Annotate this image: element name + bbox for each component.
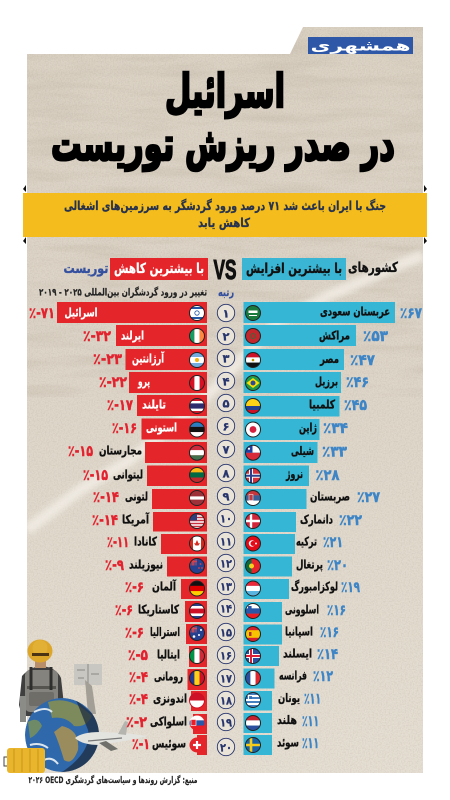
row 7 decrease: Hungary [68,442,207,463]
row 1 increase: Saudi Arabia: عربستان سعودی [320,304,390,320]
row 16 decrease: Italy [128,646,207,667]
row 4 decrease: Peru: پرو [137,374,150,390]
row 12 increase: Portugal: ٪۲۰ [327,556,348,574]
row 1 increase: Saudi Arabia [244,302,422,323]
flag: Peru [189,375,205,391]
row 7 increase: Chile: ٪۳۳ [322,442,347,460]
row 3 increase: Egypt [244,349,375,370]
rank column: ۱۷ [220,672,232,686]
row 10 decrease: United States [92,511,207,532]
row 19 increase: Netherlands: هلند [277,713,297,727]
logo: Hamshahri: همشهری [310,38,410,54]
flag: Egypt [245,352,261,368]
row 14 increase: Slovenia: ٪۱۶ [327,601,346,619]
rank column: ۱۰ [220,512,232,526]
rank column: ۶ [222,420,230,434]
row 19 decrease: Slovakia [126,713,207,734]
row 1 decrease: Israel: ٪-۷۱ [29,304,55,322]
row 9 decrease: Latvia: ٪-۱۴ [93,488,119,506]
heading: countries with highest decrease [64,258,208,280]
flag: Chile [245,445,261,461]
flag: United States [189,513,205,529]
row 9 decrease: Latvia: لتونی [125,490,148,504]
heading: countries with highest decrease: با بیشترین کاهش [114,261,204,277]
row 13 increase: Luxembourg [244,578,360,599]
row 1 decrease: Israel: اسرائیل [64,306,98,320]
row 14 decrease: Costa Rica: ٪-۶ [115,601,133,619]
row 14 increase: Slovenia [244,601,346,622]
rank column: ۲ [222,330,230,344]
row 13 decrease: Germany: آلمان [152,578,177,594]
rank column: ۴ [222,374,230,388]
flag: Canada [189,536,205,552]
row 3 decrease: Argentina [93,349,207,370]
flag: Romania [189,670,205,686]
row 16 decrease: Italy: ٪-۵ [128,646,148,664]
flag: Saudi Arabia [245,305,261,321]
row 11 decrease: Canada [107,533,207,554]
row 15 decrease: Australia: ٪-۶ [125,624,144,642]
rank column: ۳ [222,352,230,366]
row 2 increase: Morocco [244,325,388,346]
row 13 decrease: Germany: ٪-۶ [125,578,144,596]
row 17 decrease: Romania: رومانی [154,670,183,684]
row 18 decrease: Indonesia: اندونزی [153,692,187,706]
flag: Netherlands [245,715,261,731]
row 18 increase: Greece: ٪۱۱ [304,690,321,708]
row 8 increase: Norway: ٪۲۸ [316,466,340,484]
row 3 increase: Egypt: مصر [319,352,339,366]
flag: Morocco [245,328,261,344]
row 1 increase: Saudi Arabia: ٪۶۷ [400,304,422,322]
suitcase [4,748,45,773]
row 19 increase: Netherlands: ٪۱۱ [302,712,319,730]
row 10 increase: Denmark: دانمارک [300,512,333,526]
row 10 decrease: United States: ٪-۱۴ [92,511,118,529]
flag: Spain [245,626,261,642]
row 5 increase: Colombia: کلمبیا [309,398,335,412]
flag: Greece [245,692,261,708]
flag: Serbia [245,490,261,506]
logo: Hamshahri [308,37,413,54]
rank column: ۱۳ [220,580,232,594]
row 9 increase: Serbia [244,488,380,509]
row 12 increase: Portugal [244,556,348,576]
row 17 decrease: Romania: ٪-۴ [129,668,148,686]
row 10 increase: Denmark [244,511,362,532]
row 12 increase: Portugal: پرتغال [296,558,323,572]
rank column: ۸ [222,466,230,480]
subtitle banner: کاهش یابد [198,215,251,230]
subheading: change in arrivals: تغییر در ورود گردشگران بین‌المللی ۲۰۲۵ - ۲۰۱۹ [39,286,207,298]
row 20 decrease: Switzerland: ٪-۱ [132,735,150,753]
row 17 increase: France: ٪۱۲ [313,667,333,685]
heading: countries with highest increase [242,258,399,280]
row 7 decrease: Hungary: ٪-۱۵ [68,442,93,460]
row 12 decrease: New Zealand: ٪-۹ [105,556,124,574]
row 19 increase: Netherlands [244,712,319,733]
row 2 decrease: Ireland: ایرلند [121,328,144,342]
rank column: ۱۹ [220,716,232,730]
title [51,64,395,171]
row 8 decrease: Lithuania: لیتوانی [113,468,143,482]
row 11 increase: Turkey [244,533,343,554]
flag: Hungary [189,445,205,461]
flag: Lithuania [189,467,205,483]
row 20 increase: Sweden: ٪۱۱ [302,734,319,752]
rank column: ۱۲ [220,556,232,570]
rank column: ۱۱ [220,534,232,548]
row 11 decrease: Canada: کانادا [134,534,157,548]
row 10 decrease: United States: آمریکا [122,512,150,526]
title: اسرائیل [165,64,285,118]
flag: Japan [245,422,261,438]
flag: Switzerland [189,737,205,753]
row 4 increase: Brazil: برزیل [315,374,338,388]
map in raised hand [74,664,102,714]
row 17 increase: France: فرانسه [279,668,307,682]
row 2 decrease: Ireland: ٪-۳۲ [83,327,111,345]
flag: France [245,670,261,686]
row 12 decrease: New Zealand [105,556,207,576]
rank column: ۹ [222,490,230,504]
row 6 increase: Japan [244,419,348,440]
row 3 decrease: Argentina: ٪-۲۳ [93,350,122,368]
flag: Portugal [245,558,261,574]
flag: Turkey [245,536,261,552]
row 6 decrease: Estonia [112,418,207,440]
row 3 increase: Egypt: ٪۴۷ [350,351,375,369]
flag: Germany [189,580,205,596]
row 19 decrease: Slovakia: اسلواکی [150,714,187,730]
flag: Norway [245,468,261,484]
row 18 decrease: Indonesia: ٪-۴ [129,690,148,708]
row 14 increase: Slovenia: اسلوونی [285,602,319,618]
row 2 increase: Morocco: ٪۵۳ [363,327,388,345]
row 15 decrease: Australia: استرالیا [150,625,180,639]
row 4 decrease: Peru: ٪-۲۲ [99,373,127,391]
row 12 decrease: New Zealand: نیوزیلند [129,558,163,572]
flag: Latvia [189,490,205,506]
row 13 increase: Luxembourg: لوکزامبورگ [291,578,338,594]
rank column: ۱ [222,306,230,320]
row 15 increase: Spain [244,623,339,644]
heading: countries with highest decrease: توریست [64,261,108,277]
row 11 increase: Turkey: ترکیه [296,534,317,548]
rank column: ۱۴ [220,602,232,616]
row 4 increase: Brazil [244,372,369,393]
row 19 decrease: Slovakia: ٪-۲ [126,713,147,731]
plane [75,721,148,751]
row 6 decrease: Estonia: ٪-۱۶ [112,419,137,437]
row 5 decrease: Thailand: ٪-۱۷ [107,396,133,414]
source note: منبع: گزارش روندها و سیاست‌های گردشگری OECD‏ ۲۰۲۶ [29,774,198,786]
flag: Australia [189,625,205,641]
row 15 increase: Spain: ٪۱۶ [320,623,339,641]
subtitle banner [23,185,427,244]
row 11 decrease: Canada: ٪-۱۱ [107,533,129,551]
flag: Costa Rica [189,603,205,619]
row 7 increase: Chile [244,442,347,463]
row 8 increase: Norway: نروژ [285,467,303,482]
row 16 increase: Iceland: ٪۱۴ [317,645,338,663]
row 5 decrease: Thailand [107,395,207,416]
row 1 decrease: Israel [29,302,207,323]
flag: Brazil [245,375,261,391]
rank column: ۱۵ [220,626,232,640]
row 5 increase: Colombia: ٪۴۵ [344,396,367,414]
subtitle banner: جنگ با ایران باعث شد ۷۱ درصد ورود گردشگر به سرزمین‌های اشغالی [64,198,386,213]
row 4 decrease: Peru [99,372,207,393]
flag: Iceland [245,648,261,664]
row 8 decrease: Lithuania: ٪-۱۵ [83,466,108,484]
row 2 decrease: Ireland [83,325,207,346]
traveler with backpack [19,640,64,722]
row 13 decrease: Germany [125,578,207,599]
rank column: ۷ [222,442,230,456]
row 7 decrease: Hungary: مجارستان [99,444,142,458]
row 16 increase: Iceland [244,645,338,666]
flag: Indonesia [189,692,205,708]
row 18 increase: Greece: یونان [278,691,300,706]
rank column: ۱۶ [220,648,232,662]
row 14 decrease: Costa Rica: کاستاریکا [138,602,179,616]
row 16 decrease: Italy: ایتالیا [157,648,180,662]
row 9 increase: Serbia: ٪۲۷ [357,488,380,506]
row 16 increase: Iceland: ایسلند [283,646,312,660]
flag: Ireland [189,328,205,344]
row 2 increase: Morocco: مراکش [319,328,350,342]
flag: Slovakia [189,715,205,731]
row 6 increase: Japan: ٪۳۴ [323,419,348,437]
row 20 decrease: Switzerland: سوئیس [152,736,186,752]
row 9 decrease: Latvia [93,488,207,509]
flag: Thailand [189,398,205,414]
row 8 decrease: Lithuania [83,466,207,486]
row 6 decrease: Estonia: استونی [146,420,177,436]
row 9 increase: Serbia: صربستان [310,490,350,504]
flag: Luxembourg [245,580,261,596]
row 20 increase: Sweden: سوئد [277,736,299,750]
subheading: rank: رتبه [218,286,234,299]
row 17 increase: France [244,667,333,688]
rank column: ۲۰ [220,740,232,754]
illustration: traveler, globe, plane, suitcase [4,640,148,773]
row 17 decrease: Romania [129,668,207,690]
rank column [217,304,235,756]
row 8 increase: Norway [244,466,340,486]
heading: VS: VS [214,254,236,285]
row 11 increase: Turkey: ٪۲۱ [323,533,343,551]
row 20 decrease: Switzerland [132,735,207,755]
flag: Denmark [245,513,261,529]
flag: Argentina [189,352,205,368]
row 6 increase: Japan: ژاپن [299,420,317,434]
flag: Colombia [245,398,261,414]
row 3 decrease: Argentina: آرژانتین [132,350,165,366]
row 13 increase: Luxembourg: ٪۱۹ [341,578,360,596]
row 20 increase: Sweden [244,734,319,755]
globe [25,698,100,772]
row 5 increase: Colombia [244,396,367,416]
flag: Italy [189,648,205,664]
row 10 increase: Denmark: ٪۲۲ [339,511,362,529]
row 5 decrease: Thailand: تایلند [142,398,166,412]
flag: Sweden [245,737,261,753]
row 4 increase: Brazil: ٪۴۶ [346,373,369,391]
row 14 decrease: Costa Rica [115,601,207,622]
rank column: ۵ [222,396,230,410]
row 15 decrease: Australia [125,624,207,644]
heading: countries with highest increase: با بیشترین افزایش [246,261,342,277]
heading: countries with highest increase: کشورهای [348,260,399,276]
flag: Estonia [189,422,205,438]
row 7 increase: Chile: شیلی [291,444,314,458]
flag: Israel [189,305,205,321]
flag: New Zealand [189,558,205,574]
row 15 increase: Spain: اسپانیا [285,624,313,638]
rank column: ۱۸ [220,694,232,708]
row 18 increase: Greece [244,690,321,710]
flag: Slovenia [245,603,261,619]
row 18 decrease: Indonesia [129,690,207,711]
